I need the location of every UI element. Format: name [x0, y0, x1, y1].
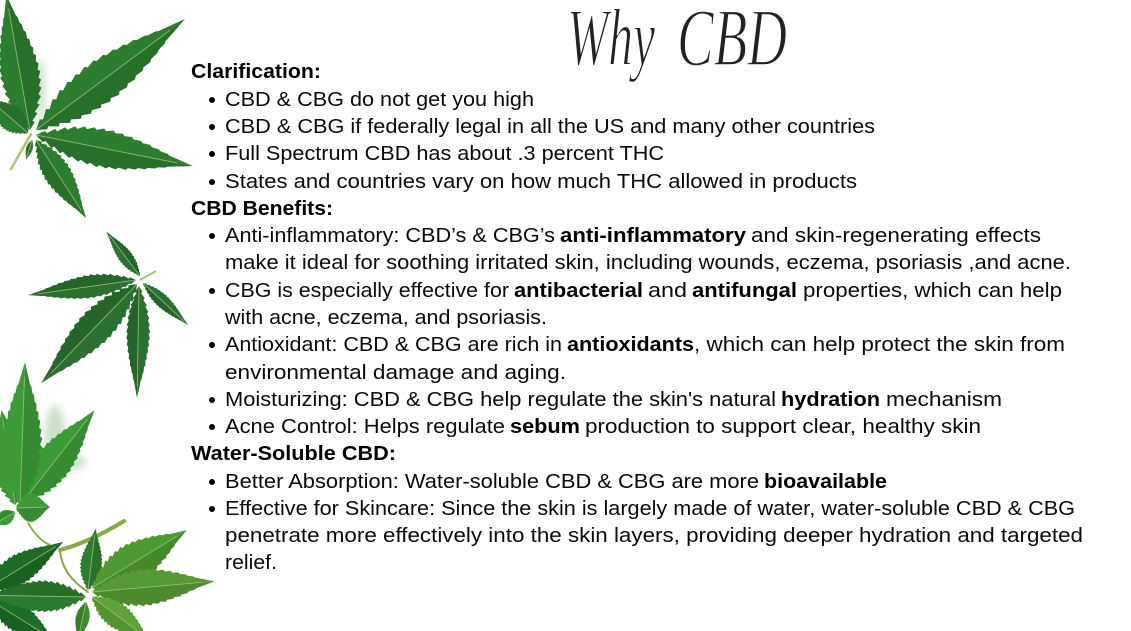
leaf: bottom left upper cluster	[0, 361, 110, 532]
bullet list: CBD benefits: antifungal	[692, 280, 797, 302]
bullet list: water-soluble CBD: relief.	[225, 552, 277, 574]
leaf: top left	[0, 0, 198, 226]
heading: clarification: Clarification:	[191, 61, 321, 83]
bullet list: CBD benefits: antioxidants	[567, 334, 694, 356]
section: clarification	[191, 61, 875, 193]
bullet list: water-soluble CBD: bioavailable	[764, 471, 887, 493]
bullet list: clarification	[209, 89, 875, 193]
bullet list: CBD benefits: Acne Control: Helps regulate	[225, 416, 505, 438]
leaf: middle left	[26, 227, 193, 398]
bullet list: CBD benefits: Moisturizing: CBD & CBG help regulate the skin's natural	[225, 389, 776, 411]
bullet list: clarification: Full Spectrum CBD has about .3 percent THC	[225, 143, 664, 165]
bullet list: CBD benefits: Antioxidant: CBD & CBG are rich in	[225, 334, 562, 356]
title	[567, 0, 787, 83]
bullet list: CBD benefits: sebum	[510, 416, 580, 438]
bullet list: water-soluble CBD	[209, 471, 1083, 574]
bullet list: CBD benefits: environmental damage and aging.	[225, 362, 566, 384]
bullet list: CBD benefits: production to support clear, healthy skin	[585, 416, 981, 438]
bullet list: clarification: CBD & CBG if federally legal in all the US and many other countries	[225, 116, 875, 138]
section: water-soluble CBD	[191, 443, 1083, 574]
bullet list: CBD benefits: properties, which can help	[803, 280, 1062, 302]
leaf: bottom left lower cluster	[0, 513, 216, 631]
bullet list: CBD benefits	[209, 225, 1071, 438]
section: CBD benefits	[191, 198, 1071, 438]
bullet list: CBD benefits: anti-inflammatory	[560, 225, 747, 247]
heading: water-soluble CBD: Water-Soluble CBD:	[191, 443, 396, 465]
heading: CBD benefits: CBD Benefits:	[191, 198, 333, 220]
bullet list: clarification: States and countries vary on how much THC allowed in products	[225, 171, 857, 193]
bullet list: CBD benefits: mechanism	[886, 389, 1002, 411]
bullet list: CBD benefits: make it ideal for soothing irritated skin, including wounds, eczema, psoriasis ,and acne.	[225, 252, 1071, 274]
bullet list: CBD benefits: and skin-regenerating effects	[751, 225, 1041, 247]
bullet list: CBD benefits: CBG is especially effective for	[225, 280, 509, 302]
leaf: stems	[28, 521, 124, 592]
bullet list: clarification: CBD & CBG do not get you high	[225, 89, 534, 111]
bullet list: water-soluble CBD: Better Absorption: Water-soluble CBD & CBG are more	[225, 471, 759, 493]
bullet list: CBD benefits: with acne, eczema, and psoriasis.	[224, 307, 547, 329]
bullet list: CBD benefits: hydration	[781, 389, 880, 411]
bullet list: CBD benefits: Anti-inflammatory: CBD’s & CBG’s	[225, 225, 555, 247]
bullet list: CBD benefits: antibacterial	[514, 280, 643, 302]
bullet list: water-soluble CBD: Effective for Skincare: Since the skin is largely made of water, water-soluble CBD & CBG	[225, 498, 1075, 520]
bullet list: water-soluble CBD: penetrate more effectively into the skin layers, providing deeper hydration and targeted	[225, 525, 1083, 547]
leaf shadows	[35, 58, 86, 470]
bullet list: CBD benefits: and	[648, 280, 687, 302]
bullet list: CBD benefits: , which can help protect the skin from	[694, 334, 1065, 356]
